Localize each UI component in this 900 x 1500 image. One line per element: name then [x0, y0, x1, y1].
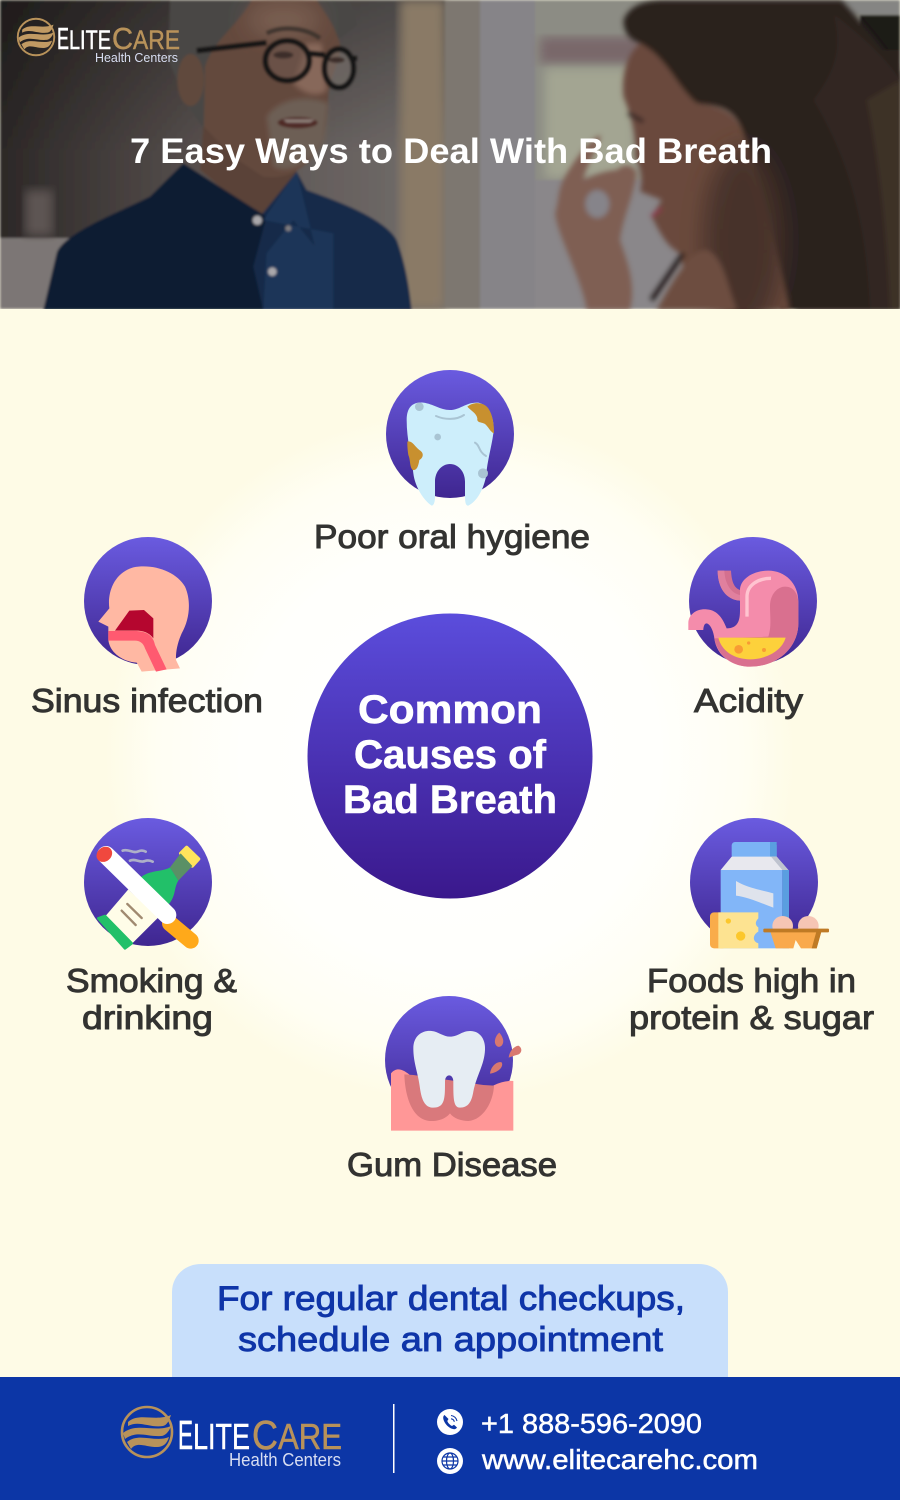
heading: center text: Common	[358, 688, 542, 732]
panel: gum disease	[347, 996, 557, 1183]
hero logo: ARE	[133, 25, 180, 55]
hero logo: E	[57, 21, 69, 56]
icon: stomach with acid	[688, 537, 817, 667]
label: smoking and drinking	[66, 962, 237, 1036]
panel: poor oral hygiene	[314, 370, 590, 555]
hero logo: C	[112, 21, 133, 56]
label: foods high in protein and sugar: protein & sugar	[629, 999, 874, 1036]
panel: smoking and drinking	[66, 818, 237, 1036]
footer logo: ARE	[278, 1416, 342, 1457]
center glow	[105, 412, 795, 1102]
phone number: +1 888-596-2090	[481, 1408, 702, 1439]
icon: phone	[437, 1409, 463, 1435]
label: smoking and drinking: drinking	[82, 999, 213, 1036]
hero logo: LITE	[69, 25, 111, 55]
footer logo: E	[178, 1412, 193, 1458]
website: www.elitecarehc.com	[481, 1444, 758, 1475]
icon: decayed tooth	[386, 370, 514, 506]
icon: head cross-section	[84, 537, 212, 672]
label: foods high in protein and sugar	[629, 962, 874, 1036]
man	[43, 0, 412, 310]
footer logo: LITE	[193, 1416, 250, 1457]
panel: acidity	[688, 537, 817, 719]
label: foods high in protein and sugar: Foods high in	[647, 962, 856, 999]
hero photo: man and woman	[0, 0, 900, 333]
footer logo: C	[252, 1412, 278, 1458]
icon: globe	[437, 1448, 463, 1474]
heading: center text: Causes of	[354, 733, 547, 777]
panel: sinus infection	[31, 537, 263, 719]
hero logo: Health Centers	[95, 50, 178, 65]
icon: crossed cigarette and bottle	[84, 818, 212, 948]
heading: center text: Bad Breath	[343, 778, 557, 822]
footer logo: Health Centers	[229, 1450, 341, 1470]
icon: milk carton cheese eggs	[690, 818, 829, 948]
callout: schedule an appointment: schedule an appointment	[238, 1321, 664, 1359]
woman	[555, 0, 900, 333]
label: gum disease: Gum Disease	[347, 1146, 557, 1183]
label: poor oral hygiene: Poor oral hygiene	[314, 518, 590, 555]
hero logo	[18, 19, 180, 65]
footer logo	[122, 1407, 342, 1470]
panel: common causes center circle	[308, 614, 592, 898]
footer	[0, 1377, 900, 1500]
label: sinus infection: Sinus infection	[31, 682, 263, 719]
callout: schedule an appointment	[172, 1264, 728, 1377]
label: acidity: Acidity	[694, 682, 804, 719]
label: smoking and drinking: Smoking &	[66, 962, 237, 999]
title: 7 Easy Ways to Deal With Bad Breath	[130, 132, 772, 171]
panel: foods high in protein and sugar	[629, 818, 874, 1036]
heading: center text	[343, 688, 557, 822]
icon: tooth in inflamed gum	[385, 996, 521, 1131]
callout: schedule an appointment: For regular dental checkups,	[217, 1280, 685, 1318]
